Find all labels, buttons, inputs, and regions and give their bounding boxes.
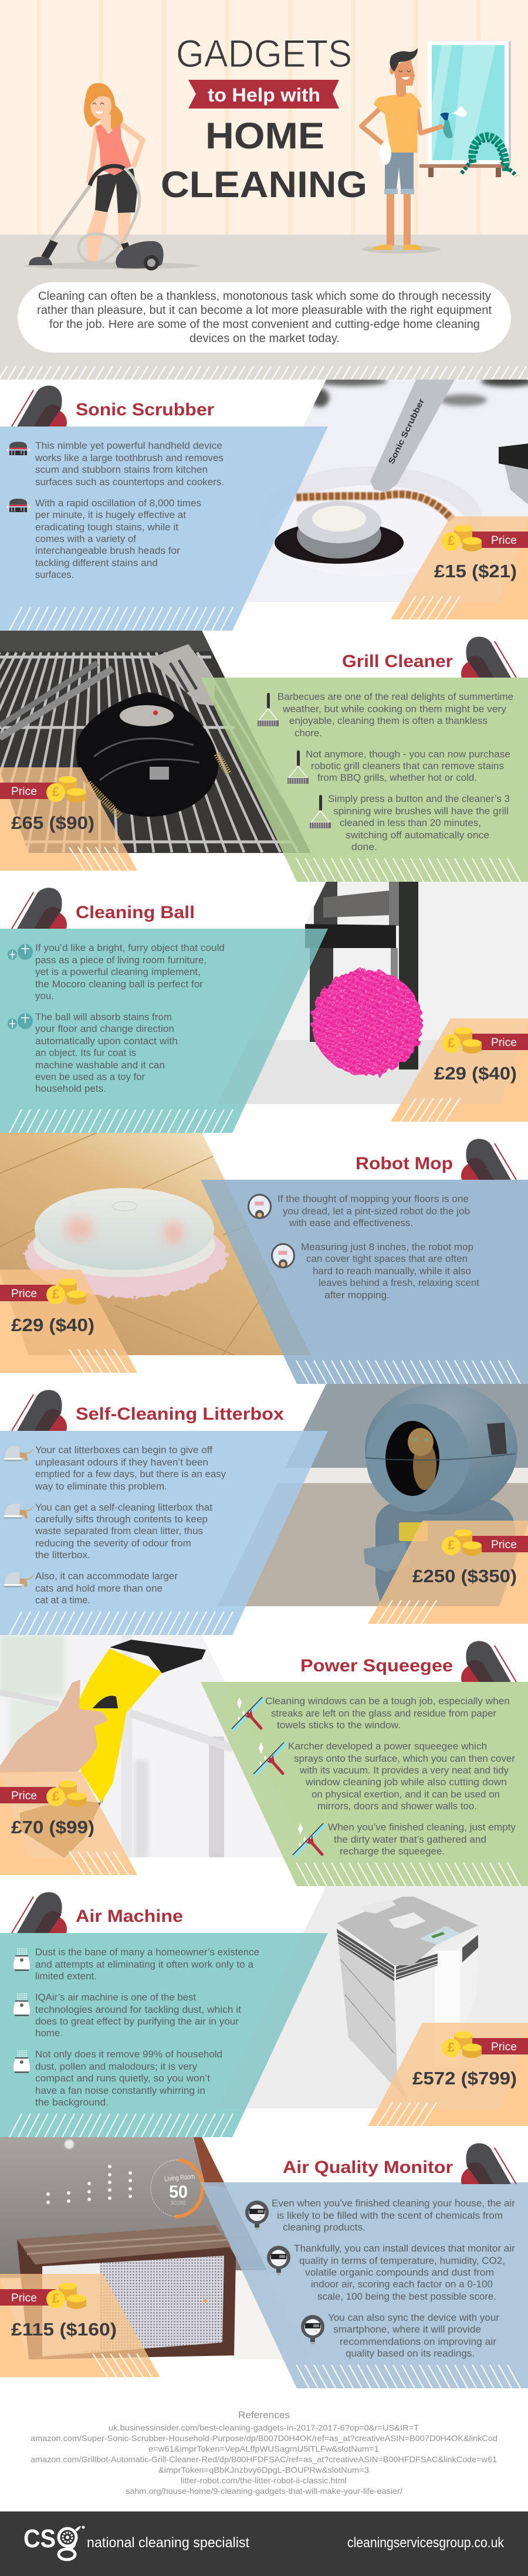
text block: paragraph 2: can cover tight spaces that are often [306,1254,468,1264]
text block: paragraph 1: scum and stubborn stains from kitchen [35,465,208,475]
text block: paragraph 2: an object. Its fur coat is [35,1048,136,1058]
references [31,2409,497,2496]
price tag: £ [52,1287,60,1301]
text block: paragraph 2: indoor air, scoring each factor on a 0-100 [311,2279,493,2290]
text block: paragraph 2 [288,1741,516,1812]
title: cleaning: CLEANING [161,164,367,205]
text block: paragraph 1: way to eliminate this problem. [35,1481,167,1492]
panel: teal description background [0,929,328,1133]
text block: paragraph 3 [35,1571,178,1606]
icon: sparkle balls second [8,1013,33,1029]
price tag [0,2274,160,2377]
photo: sonic scrubber on cooker burner [246,380,528,602]
text block: paragraph 1: and attempts at eliminating it often work only to a [35,1959,254,1970]
price tag: £ [448,1538,455,1552]
price tag: Price [491,534,517,547]
text block: paragraph 2: Karcher developed a power squeegee which [288,1741,487,1752]
text block: paragraph 2 [35,1012,178,1094]
text block: paragraph 2: per minute, it is hugely effective at [35,510,186,520]
text block: paragraph 1: works like a large toothbrush and removes [35,453,224,463]
text block: paragraph 3 [35,2049,222,2108]
icon: air meter second [267,2246,290,2275]
icon: squeegee second [253,1742,285,1775]
text block: paragraph 1 [277,1194,470,1228]
panel: blue description background [0,426,328,631]
photo: wooden air quality monitor: Living Room [164,2172,195,2183]
price tag: Price [11,2292,37,2304]
text block: paragraph 1 [277,692,513,739]
text block: paragraph 1: with ease and effectiveness. [289,1218,413,1228]
text block: paragraph 2: mirrors, doors and shower walls too. [317,1801,477,1812]
price tag [368,2023,528,2126]
text block: paragraph 1: yet is a powerful cleaning implement, [35,967,201,977]
heading: air machine: Air Machine [76,1907,183,1926]
panel: green description background [201,1682,528,1886]
intro panel [18,282,511,353]
intro panel: devices on the market today. [189,332,340,345]
references: e=w61&imprToken=VepALffpWUSagrnU5lTLFw&slotNum=1 [148,2444,379,2453]
price tag [0,767,137,871]
text block: paragraph 2 [294,2243,516,2302]
photo: grill cleaning robot [0,631,317,854]
text block: paragraph 2: the litterbox. [35,1550,90,1561]
references: amazon.com/Grillbot-Automatic-Grill-Cleaner-Red/dp/B00HFDFSAC/ref=as_at?creativeASIN=B00HFDFSAC&linkCode=w61 [31,2455,497,2464]
text block: paragraph 2 [35,1502,212,1561]
text block: paragraph 1: cleaning products. [283,2222,365,2233]
price tag: Price [491,1037,517,1049]
icon: squeegee [232,1697,263,1730]
section: power squeegee [0,1635,528,1886]
text block: paragraph 1 [272,2198,516,2233]
icon: sparkle balls [8,944,33,960]
photo: wooden air quality monitor [0,2137,283,2360]
text block: paragraph 3: the background. [35,2097,109,2108]
text block: paragraph 2: The ball will absorb stains from [35,1012,172,1023]
title ribbon: to help with [188,80,339,109]
panel: pale blue description background [201,2182,528,2388]
heading: grill cleaner: Grill Cleaner [342,652,453,671]
section: air quality monitor [0,2137,528,2388]
text block: paragraph 3: When you’ve finished cleaning, just empty [328,1822,516,1833]
text block: paragraph 2: With a rapid oscillation of 8,000 times [35,498,201,509]
photo: sonic scrubber on cooker burner: Sonic Scrubber [386,397,426,465]
text block: paragraph 2: does to great effect by purifying the air in your [35,2016,239,2027]
text block: paragraph 1: emptied for a few days, but there is an easy [35,1469,226,1480]
text block: paragraph 2: even be used as a toy for [35,1072,145,1082]
text block: paragraph 2: surfaces. [35,570,74,580]
references: sahm.org/house-home/9-cleaning-gadgets-that-will-make-your-life-easier/ [126,2486,402,2496]
heading icon [461,1139,516,1180]
text block: paragraph 3: quality based on its readings. [346,2348,475,2359]
price tag: Price [11,1790,37,1802]
price tag [0,1772,137,1875]
heading: sonic scrubber: Sonic Scrubber [76,400,214,419]
heading: self-cleaning litterbox: Self-Cleaning Litterbox [76,1404,284,1424]
text block: paragraph 1: enjoyable, cleaning them is often a thankless [289,716,488,726]
tagline: national cleaning specialist [87,2535,249,2551]
text block: paragraph 3: Also, it can accommodate larger [35,1571,178,1582]
text block: paragraph 1: Cleaning windows can be a tough job, especially when [265,1696,510,1707]
text block: paragraph 2: IQAir’s air machine is one of the best [35,1992,196,2003]
heading: robot mop: Robot Mop [356,1154,453,1173]
text block: paragraph 2 [306,749,510,783]
price tag: £ [52,784,60,799]
intro panel: for the job. Here are some of the most convenient and cutting-edge home cleaning [49,318,480,331]
heading icon [12,888,67,929]
text block: paragraph 2: tackling different stains and [35,558,158,568]
icon: air machine third [13,2050,30,2073]
heading icon [12,1390,67,1431]
text block: paragraph 2: leaves behind a fresh, relaxing scent [319,1278,479,1288]
text block: paragraph 2 [35,1992,241,2039]
icon: air machine second [13,1993,30,2016]
text block: paragraph 2: interchangeable brush heads for [35,546,181,556]
text block: paragraph 2: sprays onto the surface, which you can then cover [294,1754,516,1764]
text block: paragraph 3: Simply press a button and the cleaner’s 3 [328,794,510,804]
intro panel: rather than pleasure, but it can become a lot more pleasurable with the right equipment [37,304,492,317]
text block: paragraph 1: Barbecues are one of the real delights of summertime [277,692,513,702]
heading: cleaning ball: Cleaning Ball [76,903,195,922]
text block: paragraph 3: spinning wire brushes will have the grill [333,806,509,817]
text block: paragraph 3: have a fan noise constantly whirring in [35,2086,205,2096]
section: sonic scrubber [0,376,528,631]
references: litter-robot.com/the-litter-robot-ii-classic.html [181,2476,347,2485]
section: robot mop [0,1133,528,1384]
text block: paragraph 2 [301,1242,479,1301]
price tag: £29 ($40) [11,1315,94,1335]
photo: wooden air quality monitor: SCORE [171,2200,186,2206]
price tag: £115 ($160) [11,2319,117,2340]
photo: air purifier machine [246,1886,528,2108]
price tag: £ [52,2291,60,2306]
text block: paragraph 3 [328,1822,516,1857]
text block: paragraph 2: waste separated from clean litter, thus [35,1526,203,1536]
text block: paragraph 1 [35,1445,226,1492]
text block: paragraph 1: Even when you’ve finished cleaning your house, the air [272,2198,516,2209]
text block: paragraph 2: robotic grill cleaners that can remove stains [311,761,504,771]
heading: air quality monitor: Air Quality Monitor [283,2158,453,2177]
references: uk.businessinsider.com/best-cleaning-gadgets-in-2017-2017-6?op=0&r=US&IR=T [109,2423,419,2432]
icon: cat and litterbox second [4,1504,33,1519]
text block: paragraph 2: on physical exertion, and it can be used on [312,1789,500,1800]
text block: paragraph 1: Your cat litterboxes can begin to give off [35,1445,212,1455]
text block: paragraph 1: you dread, let a pint-sized robot do the job [283,1206,470,1217]
icon: air machine [13,1948,30,1971]
illustration: woman vacuuming [23,83,199,270]
heading icon [12,1892,67,1933]
text block: paragraph 3: done. [351,842,377,852]
text block: paragraph 2: Not anymore, though - you can now purchase [306,749,510,760]
text block: paragraph 3: You can also sync the device with your [328,2313,500,2323]
text block: paragraph 1 [35,943,225,1001]
icon: air meter third [301,2315,324,2344]
logo: csg [23,2524,84,2560]
price tag: £ [448,2040,455,2054]
text block: paragraph 1: is likely to be filled with the scent of chemicals from [277,2211,503,2221]
text block: paragraph 1: Dust is the bane of many a homeowner’s existence [35,1947,259,1958]
text block: paragraph 3: recharge the squeegee. [340,1846,445,1857]
icon: robot second [272,1244,295,1268]
text block: paragraph 2: You can get a self-cleaning litterbox that [35,1502,212,1513]
price tag: £70 ($99) [11,1817,94,1837]
text block: paragraph 3: cat at a time. [35,1595,90,1606]
text block: paragraph 1: streaks are left on the glass and residue from paper [271,1708,496,1719]
text block: paragraph 2: Measuring just 8 inches, the robot mop [301,1242,473,1253]
photo: pink cleaning ball by chair [246,882,528,1104]
price tag: Price [491,2041,517,2053]
text block: paragraph 2: window cleaning job while also cutting down [305,1777,507,1788]
icon: grill brush [258,693,279,726]
text block: paragraph 2: automatically upon contact with [35,1036,178,1047]
heading icon [461,2143,516,2184]
text block: paragraph 1 [265,1696,510,1731]
icon: robot [249,1194,271,1219]
price tag: £ [52,1789,60,1803]
text block: paragraph 1: surfaces such as countertops and cookers. [35,477,224,488]
panel: green description background [201,678,528,882]
price tag: £29 ($40) [434,1063,517,1084]
photo: wooden air quality monitor: 50 [169,2182,188,2202]
text block: paragraph 3: cats and hold more than one [35,1583,163,1594]
text block: paragraph 1: the Mocoro cleaning ball is perfect for [35,979,204,990]
price tag: £250 ($350) [412,1566,517,1586]
text block: paragraph 1: unpleasant odours if they haven’t been [35,1457,208,1468]
price tag: Price [491,1539,517,1551]
price tag: £15 ($21) [434,561,517,581]
text block: paragraph 1: If the thought of mopping your floors is one [277,1194,469,1204]
price tag: £65 ($90) [11,813,94,833]
text block: paragraph 2: eradicating tough stains, while it [35,522,178,533]
text block: paragraph 2 [35,498,201,580]
section: air machine [0,1886,528,2137]
price tag: £ [448,533,455,548]
text block: paragraph 2: after mopping. [324,1290,390,1301]
text block: paragraph 3: compact and runs quietly, so you won’t [35,2073,210,2084]
text block: paragraph 3: recommendations on improving air [340,2337,497,2347]
text block: paragraph 2: hard to reach manually, while it also [313,1266,471,1277]
intro panel: Cleaning can often be a thankless, monotonous task which some do through necessity [38,290,491,303]
text block: paragraph 3: the dirty water that’s gathered and [334,1834,486,1845]
text block: paragraph 1: limited extent. [35,1971,97,1982]
text block: paragraph 2: your floor and change direction [35,1024,174,1034]
title: gadgets: GADGETS [176,32,352,75]
references: &imprToken=qBbKJnzbvy6DpgL-BOUPRw&slotNum=3 [158,2465,369,2475]
price tag: £ [448,1035,455,1050]
text block: paragraph 2: volatile organic compounds and dust from [305,2267,494,2278]
footer [0,2511,528,2576]
title ribbon: to help with: to Help with [208,84,320,106]
heading: power squeegee: Power Squeegee [300,1656,453,1675]
text block: paragraph 1: you. [35,991,54,1001]
illustration: man cleaning window [361,41,516,253]
text block: paragraph 1: This nimble yet powerful handheld device [35,441,222,451]
section: grill cleaner [0,631,528,882]
text block: paragraph 2: from BBQ grills, whether hot or cold. [317,773,477,783]
price tag: Price [11,1288,37,1300]
panel: teal description background [0,1933,328,2137]
panel: blue description background [0,1431,328,1635]
text block: paragraph 2: reducing the severity of odour from [35,1538,191,1549]
price tag: Price [11,786,37,798]
price tag [0,1270,137,1373]
text block: paragraph 3: switching off automatically once [346,830,489,841]
heading icon [12,385,67,426]
icon: grill brush second [287,750,309,784]
text block: paragraph 1 [35,441,224,488]
text block: paragraph 1 [35,1947,259,1982]
text block: paragraph 3 [328,794,510,852]
section: self-cleaning litterbox [0,1383,528,1635]
text block: paragraph 1: weather, but while cooking on them might be very [282,704,507,715]
text block: paragraph 1: chore. [295,728,322,739]
price tag [368,1521,528,1624]
text block: paragraph 3: smartphone, where it will provide [333,2324,481,2335]
references: References [238,2409,290,2421]
logo: csg: CS [23,2524,56,2553]
text block: paragraph 2: carefully sifts through contents to keep [35,1514,208,1525]
heading icon [461,637,516,678]
heading icon [461,1641,516,1682]
photo: robot mop on wood floor [0,1133,317,1356]
price tag: £572 ($799) [412,2068,517,2088]
icon: air meter [245,2201,269,2230]
photo: hand holding yellow window vacuum [0,1635,283,1857]
text block: paragraph 2: Thankfully, you can install devices that monitor air [294,2243,516,2254]
text block: paragraph 3: Not only does it remove 99% of household [35,2049,222,2060]
icon: brush [7,442,31,455]
text block: paragraph 2: scale, 100 being the best possible score. [317,2291,496,2302]
icon: cat and litterbox third [4,1572,33,1587]
text block: paragraph 2: technologies around for tackling dust, which it [35,2005,241,2015]
panel: steel blue description background [201,1180,528,1384]
icon: brush second [7,499,31,512]
text block: paragraph 3: cleaned in less than 20 minutes, [340,818,481,828]
title: home: HOME [205,116,324,157]
text block: paragraph 2: household pets. [35,1084,106,1094]
price tag [391,516,528,620]
text block: paragraph 2: with its vacuum. It provides a very neat and tidy [299,1765,509,1776]
text block: paragraph 1: If you’d like a bright, furry object that could [35,943,225,953]
references: amazon.com/Super-Sonic-Scrubber-Household-Purpose/dp/B007D0H4OK/ref=as_at?creativeASIN=B007D0H4OK&linkCod [31,2433,497,2443]
text block: paragraph 2: comes with a variety of [35,534,136,544]
icon: cat and litterbox [4,1446,33,1461]
text block: paragraph 1: towels sticks to the window. [277,1720,401,1731]
text block: paragraph 2: machine washable and it can [35,1060,165,1071]
text block: paragraph 2: home. [35,2028,63,2039]
website: cleaningservicesgroup.co.uk [347,2535,505,2551]
header illustration background [0,0,528,380]
icon: squeegee third [293,1823,324,1856]
photo: litterbox with cat [211,1383,528,1607]
text block: paragraph 2: quality in terms of temperature, humidity, CO2, [299,2256,505,2266]
text block: paragraph 3 [328,2313,500,2359]
section: cleaning ball [0,882,528,1133]
price tag [391,1018,528,1122]
text block: paragraph 3: dust, pollen and malodours; it is very [35,2062,198,2072]
text block: paragraph 1: pass as a piece of living room furniture, [35,955,207,966]
icon: grill brush third [310,795,331,828]
